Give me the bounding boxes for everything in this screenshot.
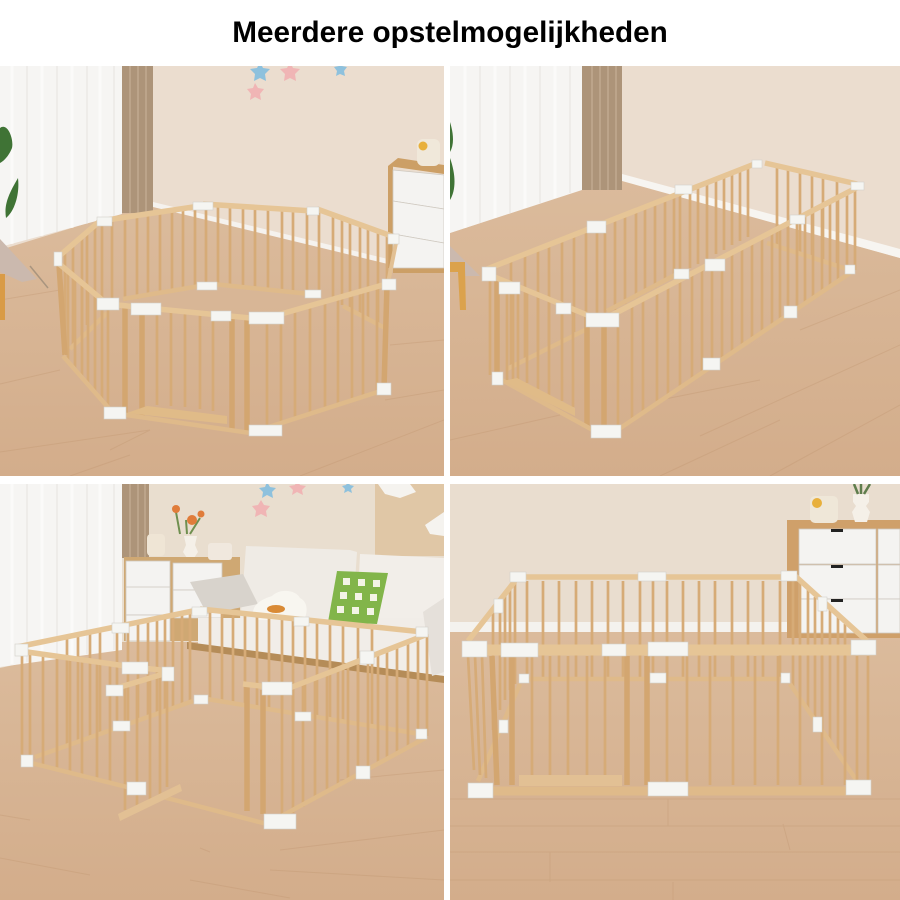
skirting [450, 622, 790, 632]
playpen: back panels [487, 163, 857, 369]
playpen: front panels [20, 634, 428, 824]
flower vase [172, 505, 204, 558]
teepee edge [0, 239, 48, 320]
panel: octagon layout [0, 62, 444, 476]
floor planks [450, 290, 900, 476]
playpen: back panels [468, 574, 867, 781]
floor planks [0, 290, 444, 476]
floor [450, 180, 900, 476]
plant [0, 127, 18, 218]
connectors [462, 571, 876, 798]
pillows [190, 571, 388, 624]
floor planks [450, 799, 900, 900]
white curtain [0, 66, 122, 247]
stars [252, 484, 354, 517]
floor [450, 632, 900, 900]
plant [450, 122, 454, 200]
panel: long rectangle layout [450, 66, 900, 476]
playpen: front panels [57, 238, 397, 433]
dresser [388, 139, 444, 273]
floor planks [0, 770, 444, 898]
dresser [787, 484, 900, 638]
panel: open gate layout [0, 480, 445, 900]
white curtain [450, 66, 582, 233]
title: Meerdere opstelmogelijkheden [232, 16, 668, 49]
wall stars [247, 66, 347, 100]
dresser [124, 534, 240, 641]
playpen: front panels [487, 186, 860, 434]
skirting [622, 174, 900, 258]
playpen: back panels [17, 609, 423, 757]
floor [0, 642, 444, 900]
panel: square layout [450, 484, 900, 900]
playpen: front panels [468, 650, 875, 791]
sofa [187, 546, 444, 683]
connectors [482, 160, 864, 438]
connectors [54, 202, 399, 436]
connectors [15, 607, 428, 829]
stool and teepee [450, 246, 480, 310]
wall art [375, 484, 445, 556]
white curtain [0, 484, 122, 667]
playpen: back panels [57, 204, 397, 350]
brown curtain [582, 66, 622, 190]
floor [0, 203, 444, 476]
brown curtain [122, 484, 149, 558]
skirting [153, 202, 392, 265]
brown curtain [122, 66, 153, 213]
